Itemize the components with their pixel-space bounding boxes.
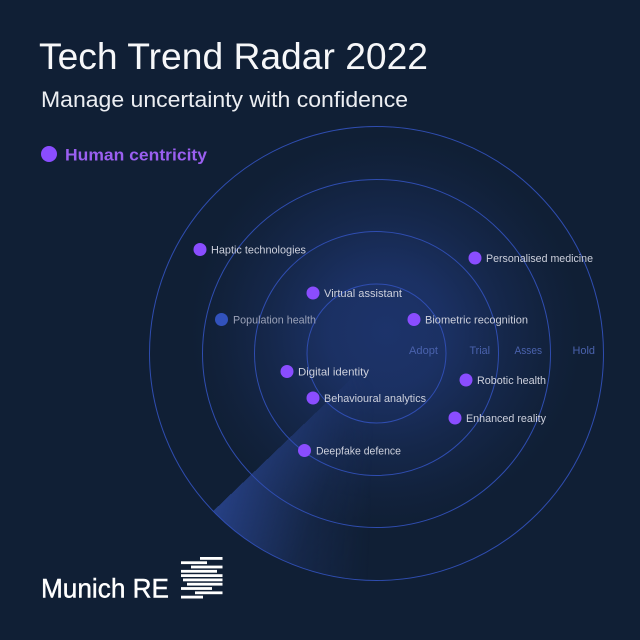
radar rings bbox=[150, 126, 604, 580]
subtitle: Manage uncertainty with confidence bbox=[41, 87, 408, 112]
ring labels bbox=[409, 345, 595, 357]
trend: Digital identity: Digital identity bbox=[298, 366, 370, 378]
radar centre glow bbox=[150, 126, 604, 580]
logo mark bbox=[181, 557, 222, 598]
legend: Human centricity: Human centricity bbox=[65, 146, 208, 164]
ring labels: Hold bbox=[572, 345, 595, 357]
trend: Deepfake defence: Deepfake defence bbox=[316, 446, 401, 458]
trend: Robotic health: Robotic health bbox=[477, 375, 546, 387]
trend: Biometric recognition: Biometric recognition bbox=[425, 314, 528, 326]
trend: Digital identity bbox=[280, 365, 370, 378]
trend: Virtual assistant: Virtual assistant bbox=[324, 288, 402, 300]
ring labels: Asses bbox=[514, 345, 542, 357]
trend: Haptic technologies: Haptic technologies bbox=[211, 244, 306, 256]
trend: Enhanced reality: Enhanced reality bbox=[466, 413, 546, 425]
radar sweep wedge bbox=[214, 390, 342, 576]
trend: Personalised medicine: Personalised medicine bbox=[486, 253, 593, 265]
title: Tech Trend Radar 2022 bbox=[39, 35, 428, 77]
trend: Population health: Population health bbox=[233, 314, 316, 326]
trend: Robotic health bbox=[460, 374, 546, 387]
ring labels: Adopt bbox=[409, 345, 438, 357]
ring labels: Trial bbox=[470, 345, 490, 357]
trend: Behavioural analytics: Behavioural analytics bbox=[324, 393, 426, 405]
logo wordmark: Munich RE bbox=[41, 574, 169, 604]
